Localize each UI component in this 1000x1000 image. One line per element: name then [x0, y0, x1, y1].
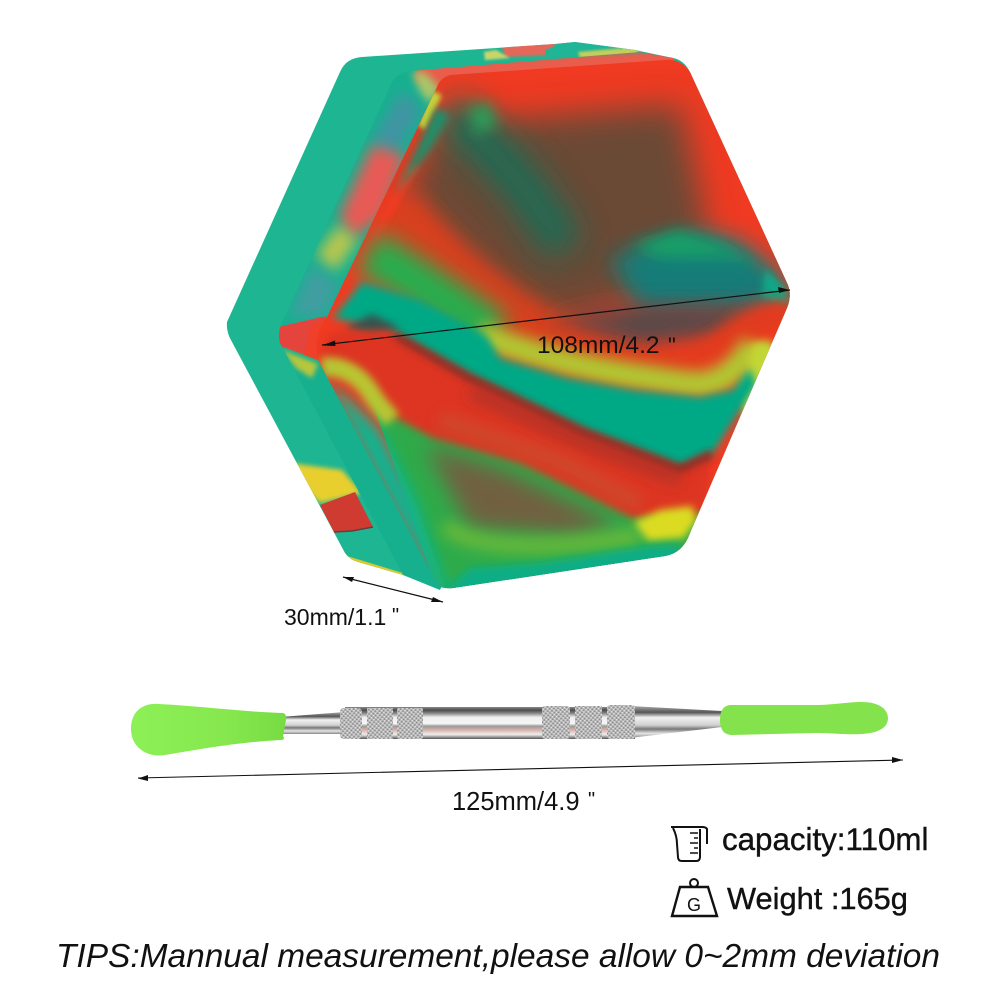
icon: weight: G	[687, 895, 701, 915]
arrow: length 125mm	[138, 757, 903, 781]
lower green base	[370, 395, 700, 600]
yellow patch	[634, 506, 697, 541]
green band on left	[368, 252, 495, 335]
left green silicone tip	[131, 704, 286, 756]
arrow: height 30mm	[343, 577, 443, 602]
brown centre	[405, 105, 705, 325]
knurled grips	[340, 705, 635, 739]
container body side	[220, 35, 800, 600]
container front face swirl	[300, 50, 800, 600]
icon: measuring cup	[671, 827, 707, 861]
right green silicone tip	[720, 702, 888, 735]
weight text: Weight :165g	[727, 881, 908, 916]
main teal band	[333, 282, 756, 468]
yellow-green stripe	[478, 335, 754, 384]
label: diameter: 108mm/4.2	[537, 332, 660, 359]
arrow: diameter 108mm	[322, 287, 790, 346]
lime streak	[445, 525, 640, 546]
dabber tool	[131, 702, 888, 756]
label: length: 125mm/4.9	[452, 788, 580, 816]
red lower band	[318, 330, 712, 518]
capacity text: capacity:110ml	[722, 822, 928, 857]
label: diameter inch mark: "	[668, 333, 676, 358]
red-orange left swath	[395, 208, 650, 365]
yellow under corner	[322, 367, 392, 420]
lower left teal	[318, 370, 450, 600]
metal shaft	[280, 706, 722, 739]
red arc right	[560, 313, 790, 363]
icon: weight	[672, 879, 717, 916]
lid corner highlight	[304, 317, 327, 360]
olive brown lower	[425, 445, 620, 535]
label: length inch mark: "	[588, 789, 595, 811]
silicone hexagon container	[220, 35, 800, 600]
label: height inch mark: "	[392, 605, 399, 627]
slate under	[550, 306, 770, 345]
label: height: 30mm/1.1	[284, 604, 386, 630]
tips note: TIPS:Mannual measurement,please allow 0~2mm deviation	[56, 938, 940, 975]
dark green top-left	[448, 110, 565, 250]
bottom teal	[445, 545, 680, 600]
container lid band	[278, 52, 674, 590]
right teal cloud	[610, 230, 790, 312]
